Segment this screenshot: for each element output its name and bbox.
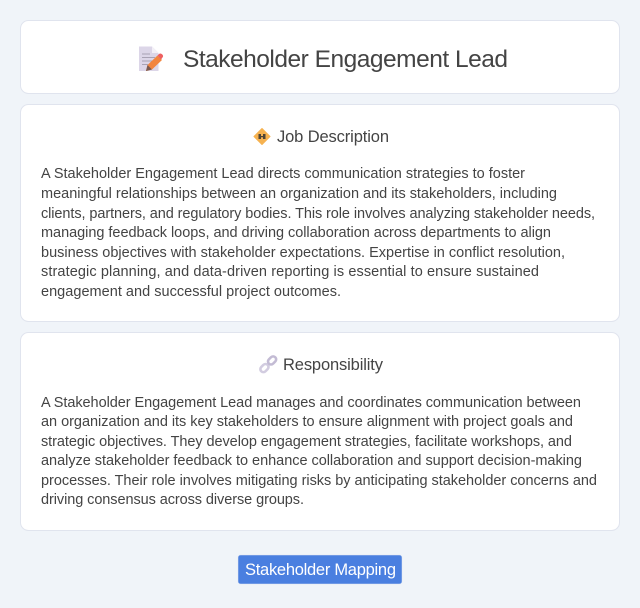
text block: responsibility: driving consensus across diverse groups. bbox=[41, 492, 304, 508]
heading: job description: Job Description bbox=[277, 128, 389, 146]
text block: job description: A Stakeholder Engagement Lead directs communication strategies to foster bbox=[41, 166, 525, 182]
icon: document with pencil bbox=[139, 46, 163, 71]
panel: responsibility bbox=[20, 332, 620, 530]
text block: job description: clients, partners, and regulatory bodies. This role involves analyzing stakeholder needs, bbox=[41, 206, 595, 222]
text block: job description: strategic planning, and data-driven reporting is essential to ensure sustained bbox=[41, 264, 539, 280]
text block: responsibility: an organization and its key stakeholders to ensure alignment with project goals and bbox=[41, 414, 573, 430]
text block: responsibility: strategic objectives. They develop engagement strategies, facilitate workshops, and bbox=[41, 434, 572, 450]
heading: responsibility: Responsibility bbox=[283, 356, 384, 374]
panel: job description bbox=[20, 104, 620, 322]
button: stakeholder mapping: Stakeholder Mapping bbox=[245, 561, 396, 579]
button: stakeholder mapping bbox=[238, 555, 402, 584]
text block: job description bbox=[41, 166, 595, 300]
text block: job description: meaningful relationships between an organization and its stakeholders, including bbox=[41, 186, 557, 202]
text block: responsibility: analyze stakeholder feedback to enhance collaboration and support decision-making bbox=[41, 453, 582, 469]
text block: job description: engagement and successful project outcomes. bbox=[41, 284, 341, 300]
icon: construction diamond bbox=[254, 128, 270, 144]
text block: job description: managing feedback loops, and driving collaboration across departments to align bbox=[41, 225, 551, 241]
panel: title card bbox=[20, 20, 620, 94]
text block: responsibility bbox=[41, 395, 597, 508]
title: Stakeholder Engagement Lead bbox=[183, 46, 508, 73]
icon: chain link bbox=[259, 355, 277, 373]
text block: responsibility: A Stakeholder Engagement Lead manages and coordinates communication between bbox=[41, 395, 581, 411]
text block: job description: business objectives with stakeholder expectations. Expertise in conflict resolution, bbox=[41, 245, 565, 261]
text block: responsibility: processes. Their role involves mitigating risks by anticipating stakeholder concerns and bbox=[41, 473, 597, 489]
